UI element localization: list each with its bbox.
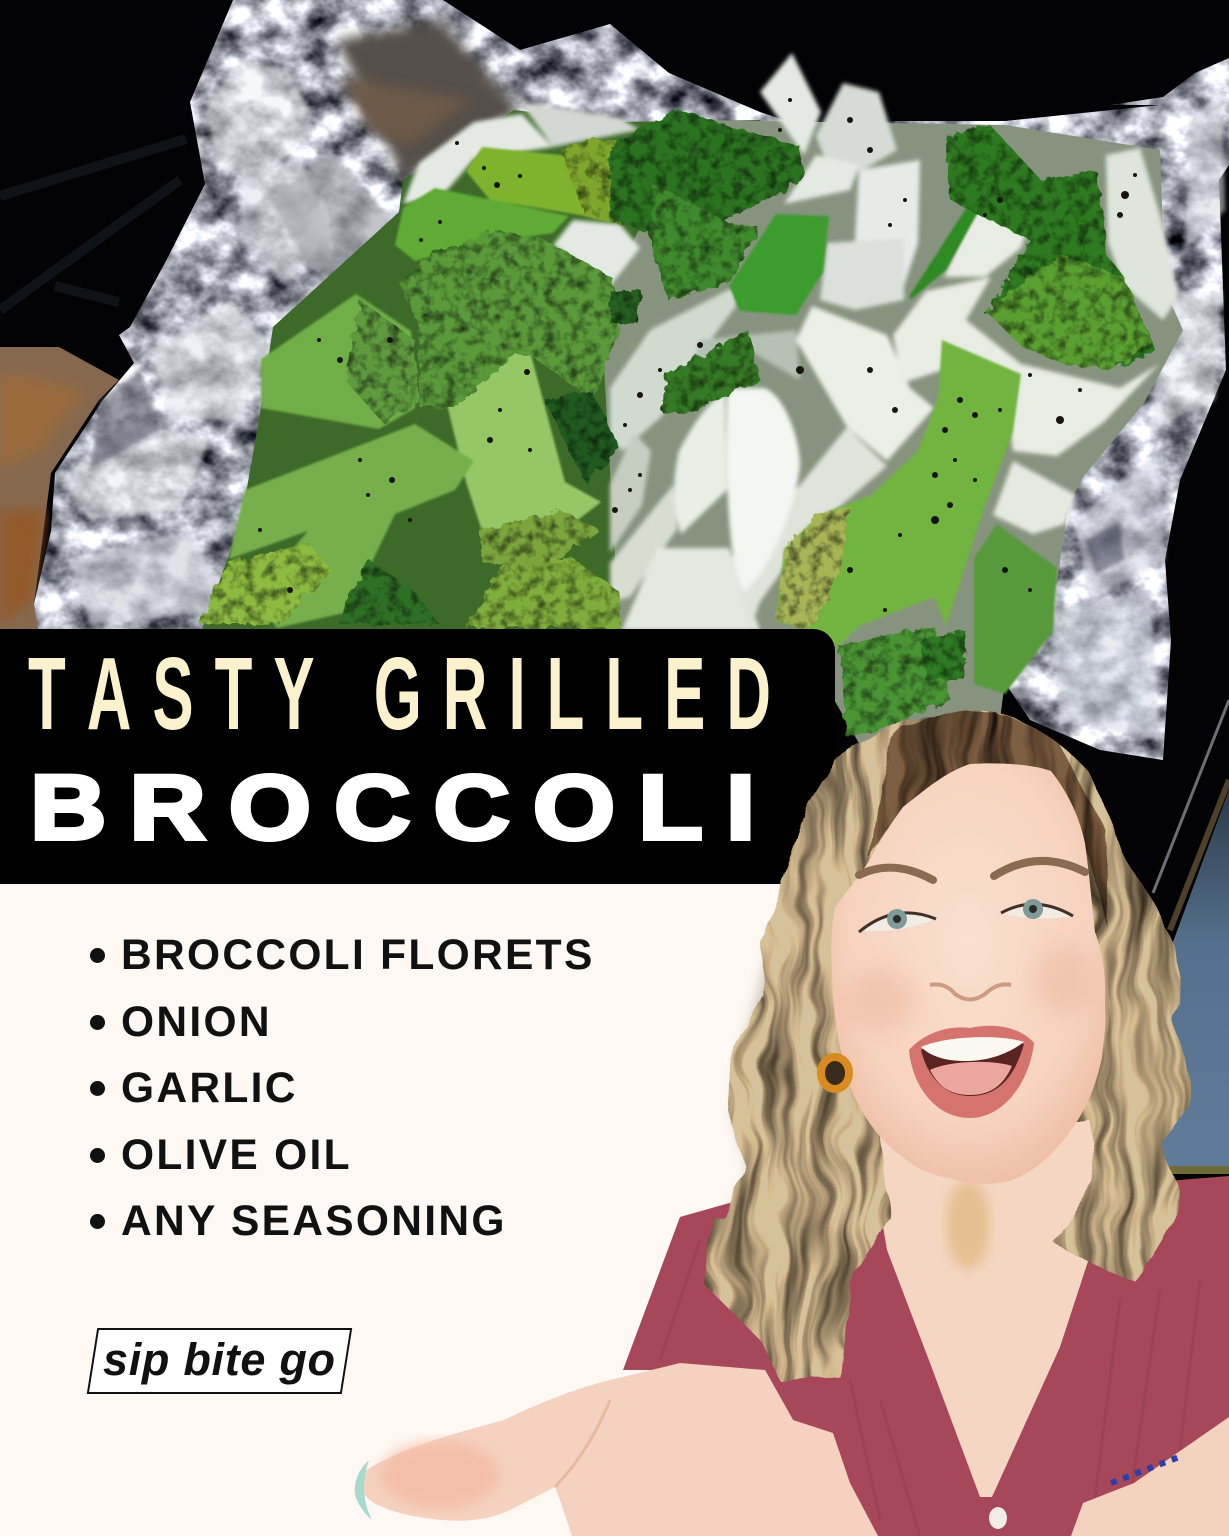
food bed (198, 53, 1183, 745)
left eye (859, 909, 936, 932)
ingredient list (90, 932, 595, 1245)
foil packet (34, 0, 1229, 760)
right brow (994, 861, 1085, 876)
woman: face (831, 763, 1105, 1184)
title line one: TASTY GRILLED (28, 636, 792, 751)
ingredient 3: GARLIC (121, 1065, 298, 1112)
neck bronze shadow (946, 1180, 990, 1270)
grill background (0, 0, 1229, 1200)
cream panel (0, 884, 800, 1536)
woman: shirt (623, 1176, 1229, 1536)
nose (930, 984, 1011, 1000)
foil: crease facets (60, 60, 1225, 740)
mouth (909, 1026, 1034, 1118)
hair dark crown (869, 712, 1110, 930)
palm crease (555, 1400, 610, 1487)
logo: sip bite go (103, 1334, 336, 1385)
ingredient 5: ANY SEASONING (121, 1198, 507, 1245)
title line two: BROCCOLI (30, 757, 778, 859)
ingredient 2: ONION (121, 999, 272, 1046)
grilled meat at left (0, 347, 119, 630)
button (989, 1507, 1007, 1529)
base under food right (600, 120, 1183, 745)
title label background (0, 629, 835, 884)
foil: black gap top right (895, 105, 1160, 121)
woman: earring (821, 1057, 849, 1089)
woman: hair (703, 711, 1190, 1383)
broccoli stems (229, 147, 1057, 694)
woman: neck and chest (860, 1090, 1115, 1497)
cheek blush left (844, 968, 916, 1032)
hair shadow on background (715, 950, 800, 1380)
woman (355, 711, 1229, 1536)
foil: dark inner back panel (336, 20, 520, 180)
bracelet (1111, 1457, 1179, 1483)
onion pieces (403, 53, 1179, 630)
left brow (859, 868, 933, 880)
ingredient 4: OLIVE OIL (121, 1132, 352, 1179)
woman: pointing arm and hand (359, 1363, 878, 1536)
logo (86, 1328, 352, 1394)
ingredient 1: BROCCOLI FLORETS (121, 932, 595, 979)
foil: main sheet (34, 0, 1229, 760)
base under food left (198, 110, 800, 640)
fingernail (355, 1460, 372, 1520)
foil: brown inner crease (340, 78, 470, 145)
cheek blush right (1033, 944, 1097, 1016)
broccoli florets (198, 109, 1155, 738)
shirt ribs (660, 1240, 1200, 1536)
woman: right forearm (1071, 1417, 1229, 1536)
pepper specks (258, 98, 1137, 612)
right eye (1001, 899, 1073, 919)
thumb tip blush (380, 1441, 500, 1509)
